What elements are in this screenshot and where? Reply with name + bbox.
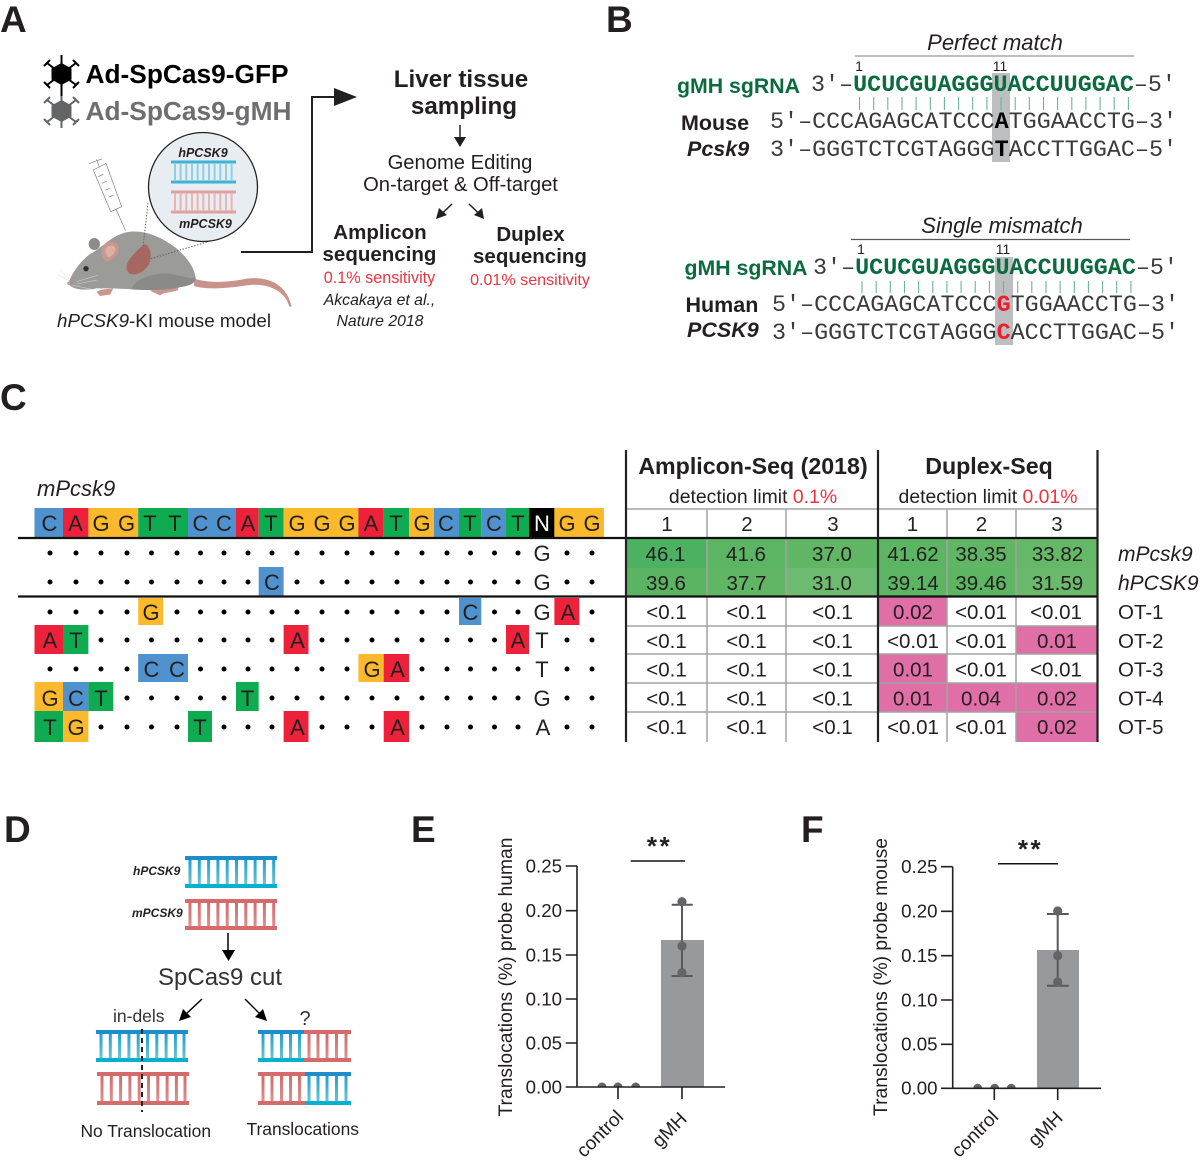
table heading: duplex-seq: Duplex-Seq: [925, 453, 1053, 479]
table values: 46.1: [646, 543, 685, 566]
arrow: down to cut: [222, 933, 235, 961]
table values: 0.02: [1037, 688, 1077, 710]
table values: <0.1: [646, 716, 687, 739]
reference sequence letters: C: [438, 511, 454, 536]
arrow: to amplicon: [436, 204, 452, 219]
legend: Ad-SpCas9-GFP: Ad-SpCas9-GFP: [86, 59, 289, 89]
mismatch and PAM letters: C: [264, 570, 280, 595]
error bar: [1047, 914, 1069, 986]
replicate numbers: [661, 513, 1063, 536]
mismatch and PAM letters: C: [463, 600, 479, 625]
base-pair ticks: [860, 97, 1128, 110]
callout circle: liver genes: [148, 132, 258, 242]
replicate numbers: 1: [661, 513, 673, 536]
mismatch and PAM letters: T: [43, 715, 57, 740]
position numbers: 1: [855, 58, 863, 74]
table values: <0.1: [812, 716, 853, 739]
text: amplicon sequencing: Nature 2018: [337, 313, 424, 330]
panel B: guide alignment: [606, 0, 1179, 347]
reference sequence letters: G: [338, 511, 356, 536]
mismatch and PAM letters: G: [533, 570, 551, 595]
reference sequence letters: T: [389, 511, 403, 536]
mismatch and PAM letters: T: [535, 657, 549, 682]
table values: 41.6: [726, 543, 766, 566]
mouse liver: [126, 244, 151, 274]
table values: 31.59: [1032, 572, 1083, 595]
table values: <0.01: [887, 716, 939, 739]
text: amplicon sequencing: Akcakaya et al.,: [323, 292, 435, 309]
bar: gMH: [661, 940, 704, 1087]
position numbers: 1: [857, 241, 865, 257]
mouse whiskers: [58, 269, 98, 290]
heading: perfect match: Perfect match: [927, 30, 1063, 55]
mismatch and PAM letters: C: [169, 657, 185, 682]
table values: 41.62: [887, 543, 939, 566]
reference sequence letters: G: [413, 511, 431, 536]
replicate numbers: 2: [976, 513, 987, 536]
y tick labels: 0.00: [901, 1078, 938, 1098]
table heading: amplicon-seq: detection limit 0.1%: [669, 486, 837, 508]
reference sequence letters: T: [168, 511, 182, 536]
y tick labels: 0.20: [901, 900, 938, 922]
x tick labels: gMH: [1024, 1108, 1068, 1151]
mismatch and PAM letters: A: [290, 715, 305, 740]
y tick labels: 0.10: [526, 988, 562, 1010]
mouse eye: [83, 266, 89, 271]
text: genome editing: [363, 152, 558, 196]
reference sequence letters: T: [264, 511, 278, 536]
x tick labels: control: [948, 1107, 1003, 1162]
mismatch and PAM letters: A: [43, 628, 58, 653]
reference sequence letters: G: [313, 511, 331, 536]
gene label mPcsk9: mPcsk9: [37, 476, 115, 501]
position numbers: [855, 58, 1007, 74]
table values: 0.01: [893, 658, 933, 682]
table values: <0.1: [726, 630, 767, 653]
replicate numbers: 3: [1051, 513, 1063, 536]
table values: 38.35: [955, 543, 1007, 566]
mismatch and PAM letters: A: [390, 715, 405, 740]
replicate numbers: 2: [741, 513, 753, 536]
mouse nose: [67, 282, 71, 285]
x tick labels: [948, 1107, 1068, 1162]
axes: [566, 866, 725, 1099]
mismatch and PAM letters: T: [535, 628, 549, 653]
table heading: amplicon-seq: [638, 453, 868, 508]
text: SpCas9 cut: SpCas9 cut: [158, 964, 282, 991]
reference sequence letters: A: [241, 511, 256, 536]
table values: 39.6: [646, 572, 686, 595]
arrow: sampling to editing: [454, 125, 466, 147]
table values: <0.1: [646, 601, 687, 624]
table values: <0.01: [887, 630, 939, 653]
data points gMH: [677, 897, 687, 977]
reference sequence letters: T: [511, 511, 525, 536]
gene label PCSK9: PCSK9: [687, 318, 759, 342]
mismatch and PAM letters: G: [533, 541, 551, 566]
row labels: OT-1: [1118, 601, 1164, 624]
x tick labels: gMH: [648, 1109, 692, 1152]
mouse DNA: [171, 192, 236, 212]
reference sequence letters: G: [92, 511, 110, 536]
table values: <0.1: [812, 688, 853, 710]
table values: 0.01: [1037, 630, 1077, 653]
mismatch and PAM letters: T: [193, 715, 207, 740]
mouse top strand: 5′–CCCAGAGCATCCCATGGAACCTG–3′: [770, 110, 1177, 136]
on-target heat cells: [627, 539, 1097, 596]
mouse ear: [101, 242, 119, 262]
y axis title: Translocations (%) probe mouse: [871, 838, 892, 1116]
mouse DNA: [185, 901, 277, 928]
reference sequence letters: C: [486, 511, 502, 536]
table values: <0.1: [646, 688, 687, 710]
mouse tail: [194, 278, 292, 307]
table values: <0.1: [726, 658, 767, 682]
human DNA: [171, 162, 236, 182]
panel label A: A: [0, 0, 27, 40]
y tick labels: 0.25: [901, 856, 938, 877]
caption: translocations: Translocations: [246, 1119, 359, 1139]
y tick labels: [901, 856, 938, 1098]
mismatch and PAM letters: A: [290, 628, 305, 653]
reference sequence letters: G: [583, 511, 601, 536]
error bar: [672, 905, 693, 976]
y tick labels: 0.00: [526, 1076, 562, 1098]
x tick labels: control: [573, 1107, 628, 1162]
reference sequence letters: C: [193, 511, 209, 536]
panel E: bar chart human probe: [411, 809, 725, 1162]
gene label Pcsk9: Pcsk9: [687, 137, 749, 161]
y tick labels: 0.10: [901, 990, 938, 1010]
guide sequence: 3′–UCUCGUAGGGUACCUUGGAC–5′: [813, 256, 1178, 282]
reference sequence letters: [42, 511, 601, 536]
gene label hPCSK9: hPCSK9: [178, 146, 228, 160]
table values: <0.01: [955, 716, 1007, 739]
species label mouse: Mouse: [681, 111, 749, 135]
row labels: OT-4: [1118, 688, 1164, 710]
table values: <0.1: [812, 601, 853, 624]
reference sequence letters: C: [216, 511, 232, 536]
icon: grey adenovirus: [44, 90, 79, 128]
alignment dots: [50, 553, 592, 727]
panel label C: C: [0, 377, 27, 418]
translocation DNA pair: [258, 1032, 351, 1103]
heading: liver tissue sampling: [394, 66, 528, 120]
text: genome editing: Genome Editing: [388, 152, 532, 174]
table values: <0.01: [955, 658, 1007, 682]
arrow: mouse to sampling: [241, 88, 357, 252]
highlight column: [995, 257, 1013, 345]
table values: <0.1: [646, 658, 687, 682]
y axis title: Translocations (%) probe human: [496, 838, 517, 1116]
y tick labels: 0.25: [526, 856, 562, 876]
position numbers: [857, 241, 1010, 257]
legend: Ad-SpCas9-gMH: Ad-SpCas9-gMH: [86, 96, 292, 126]
arrow: to translocations: [245, 999, 267, 1021]
table values: 39.14: [887, 572, 939, 595]
table values: <0.1: [726, 716, 767, 739]
mismatch and PAM letters: A: [561, 600, 576, 625]
y tick labels: 0.15: [901, 945, 938, 966]
text: duplex sequencing: Duplex: [496, 223, 565, 246]
mismatch and PAM letters: T: [94, 686, 108, 711]
table values: <0.01: [955, 630, 1007, 653]
reference sequence letters: G: [558, 511, 576, 536]
y tick labels: 0.20: [526, 900, 562, 921]
table values: [646, 543, 1083, 739]
table values: 0.04: [961, 688, 1001, 710]
panel A: experimental design: [0, 0, 591, 331]
icon: mouse: [58, 231, 292, 307]
table values: <0.1: [726, 601, 767, 624]
replicate numbers: 3: [827, 513, 839, 536]
table values: <0.01: [1030, 658, 1082, 682]
text: amplicon sequencing: Amplicon: [333, 221, 427, 244]
table values: 0.01: [893, 688, 933, 710]
icon: syringe: [89, 159, 126, 231]
table values: 37.7: [727, 572, 766, 595]
data points control: [973, 1084, 1016, 1088]
table values: <0.1: [812, 630, 853, 653]
guide sequence: 3′–UCUCGUAGGGUACCUUGGAC–5′: [811, 73, 1176, 99]
row labels: OT-2: [1118, 630, 1164, 653]
guide label: gMH sgRNA: [684, 256, 808, 280]
bar: gMH: [1037, 950, 1079, 1088]
icon: black adenovirus: [44, 55, 79, 96]
reference sequence letters: G: [118, 511, 135, 536]
mismatch and PAM letters: A: [390, 657, 405, 682]
human top strand: 5′–CCCAGAGCATCCCGTGGAACCTG–3′: [772, 293, 1179, 319]
panel label F: F: [801, 809, 824, 850]
reference sequence colour bar: [34, 508, 604, 537]
heading: liver tissue sampling: sampling: [411, 93, 517, 120]
gene label mPCSK9: mPCSK9: [179, 217, 232, 231]
gene label mPCSK9: mPCSK9: [132, 906, 183, 920]
row labels: [1118, 543, 1199, 739]
replicate numbers: 1: [907, 513, 918, 536]
mouse back ear: [89, 238, 100, 250]
mismatch and PAM letters: C: [68, 686, 84, 711]
arrow: to in-dels: [179, 999, 202, 1021]
row labels: OT-5: [1118, 716, 1164, 739]
data points control: [598, 1082, 640, 1087]
panel label D: D: [4, 809, 31, 850]
table heading: duplex-seq: detection limit 0.01%: [899, 486, 1077, 508]
data points gMH: [1053, 906, 1062, 987]
significance marker: [631, 831, 685, 861]
base-pair ticks: [862, 281, 1131, 293]
reference sequence letters: N: [534, 511, 550, 536]
mouse bottom strand: 3′–GGGTCTCGTAGGGTACCTTGGAC–5′: [770, 138, 1177, 164]
panel D: translocation schematic: [4, 809, 359, 1141]
table heading: duplex-seq: [899, 453, 1077, 508]
human DNA: [185, 858, 277, 886]
text: amplicon sequencing: 0.1% sensitivity: [324, 269, 436, 287]
table values: <0.1: [812, 658, 853, 682]
mismatch and PAM letters: [41, 541, 576, 740]
heading: single mismatch: Single mismatch: [921, 213, 1083, 238]
table values: <0.1: [726, 688, 767, 710]
text: question mark: ?: [299, 1008, 311, 1030]
table values: 0.02: [1037, 716, 1077, 739]
mismatch and PAM letters: G: [41, 686, 59, 711]
text: amplicon sequencing: [323, 221, 436, 330]
y tick labels: 0.15: [526, 944, 562, 966]
gene label hPCSK9: hPCSK9: [133, 864, 181, 878]
table values: <0.01: [1030, 601, 1082, 624]
cut site dashed line: [141, 1029, 143, 1112]
mismatch and PAM letters: A: [511, 628, 526, 653]
mismatch and PAM letters: G: [533, 686, 551, 711]
position numbers: 11: [996, 241, 1010, 257]
table grid: [627, 509, 1097, 742]
table heading: amplicon-seq: Amplicon-Seq (2018): [638, 453, 868, 479]
arrow: to duplex: [469, 204, 484, 219]
highlight column: [992, 73, 1010, 162]
table values: <0.01: [955, 601, 1007, 624]
reference sequence letters: C: [42, 511, 58, 536]
reference sequence letters: G: [288, 511, 306, 536]
caption: no translocation: No Translocation: [80, 1121, 211, 1141]
panel label E: E: [411, 809, 436, 850]
reference sequence letters: T: [463, 511, 477, 536]
guide label: gMH sgRNA: [677, 74, 800, 98]
mismatch and PAM letters: G: [142, 600, 160, 625]
mismatch and PAM letters: A: [536, 715, 551, 740]
table values: 37.0: [812, 543, 852, 566]
reference sequence letters: A: [364, 511, 379, 536]
mismatch and PAM letters: G: [533, 600, 551, 625]
off-target pink cells: [878, 597, 1097, 742]
reference sequence letters: A: [68, 511, 83, 536]
zoom dotted lines: [143, 203, 207, 259]
y tick labels: 0.05: [901, 1034, 938, 1054]
reference sequence letters: T: [143, 511, 157, 536]
text: duplex sequencing: [470, 223, 591, 289]
panel F: bar chart mouse probe: [801, 809, 1101, 1162]
significance marker: [998, 834, 1058, 864]
mismatch and PAM letters: T: [69, 628, 83, 653]
row labels: OT-3: [1118, 658, 1164, 682]
text: duplex sequencing: 0.01% sensitivity: [470, 271, 591, 289]
panel label B: B: [606, 0, 633, 40]
table values: 39.46: [955, 572, 1007, 595]
mismatch and PAM letters: G: [363, 657, 381, 682]
mismatch and PAM letters: C: [144, 657, 160, 682]
no translocation DNA pair: [96, 1029, 189, 1112]
mouse haunch shading: [132, 274, 196, 290]
mouse feet: [97, 286, 179, 296]
species label human: Human: [686, 293, 758, 317]
significance marker: **: [647, 831, 672, 861]
human bottom strand: 3′–GGGTCTCGTAGGGCACCTTGGAC–5′: [772, 321, 1179, 347]
block: single mismatch: [684, 213, 1179, 347]
x tick labels: [573, 1107, 692, 1162]
mismatch and PAM letters: T: [241, 686, 254, 711]
y tick labels: 0.05: [526, 1032, 562, 1054]
text: duplex sequencing: sequencing: [473, 245, 587, 268]
table values: 31.0: [812, 572, 852, 595]
mouse model caption: hPCSK9-KI mouse model: [57, 310, 271, 331]
mismatch cells: [34, 567, 579, 742]
heading: liver tissue sampling: Liver tissue: [394, 66, 528, 93]
table values: <0.1: [646, 630, 687, 653]
row labels: mPcsk9: [1118, 543, 1193, 566]
row labels: hPCSK9: [1118, 572, 1199, 595]
text: genome editing: On-target & Off-target: [363, 174, 558, 196]
mismatch and PAM letters: G: [67, 715, 85, 740]
table values: 33.82: [1032, 543, 1083, 566]
position numbers: 11: [993, 58, 1007, 74]
mouse body: [68, 231, 196, 290]
significance marker: **: [1018, 834, 1043, 864]
axes: [941, 867, 1101, 1100]
text: amplicon sequencing: sequencing: [323, 243, 436, 266]
block: perfect match: [677, 30, 1177, 164]
y tick labels: [526, 856, 562, 1098]
text: in-dels: in-dels: [113, 1006, 165, 1026]
panel C: off-target table: [0, 377, 1199, 742]
table values: 0.02: [893, 601, 933, 624]
